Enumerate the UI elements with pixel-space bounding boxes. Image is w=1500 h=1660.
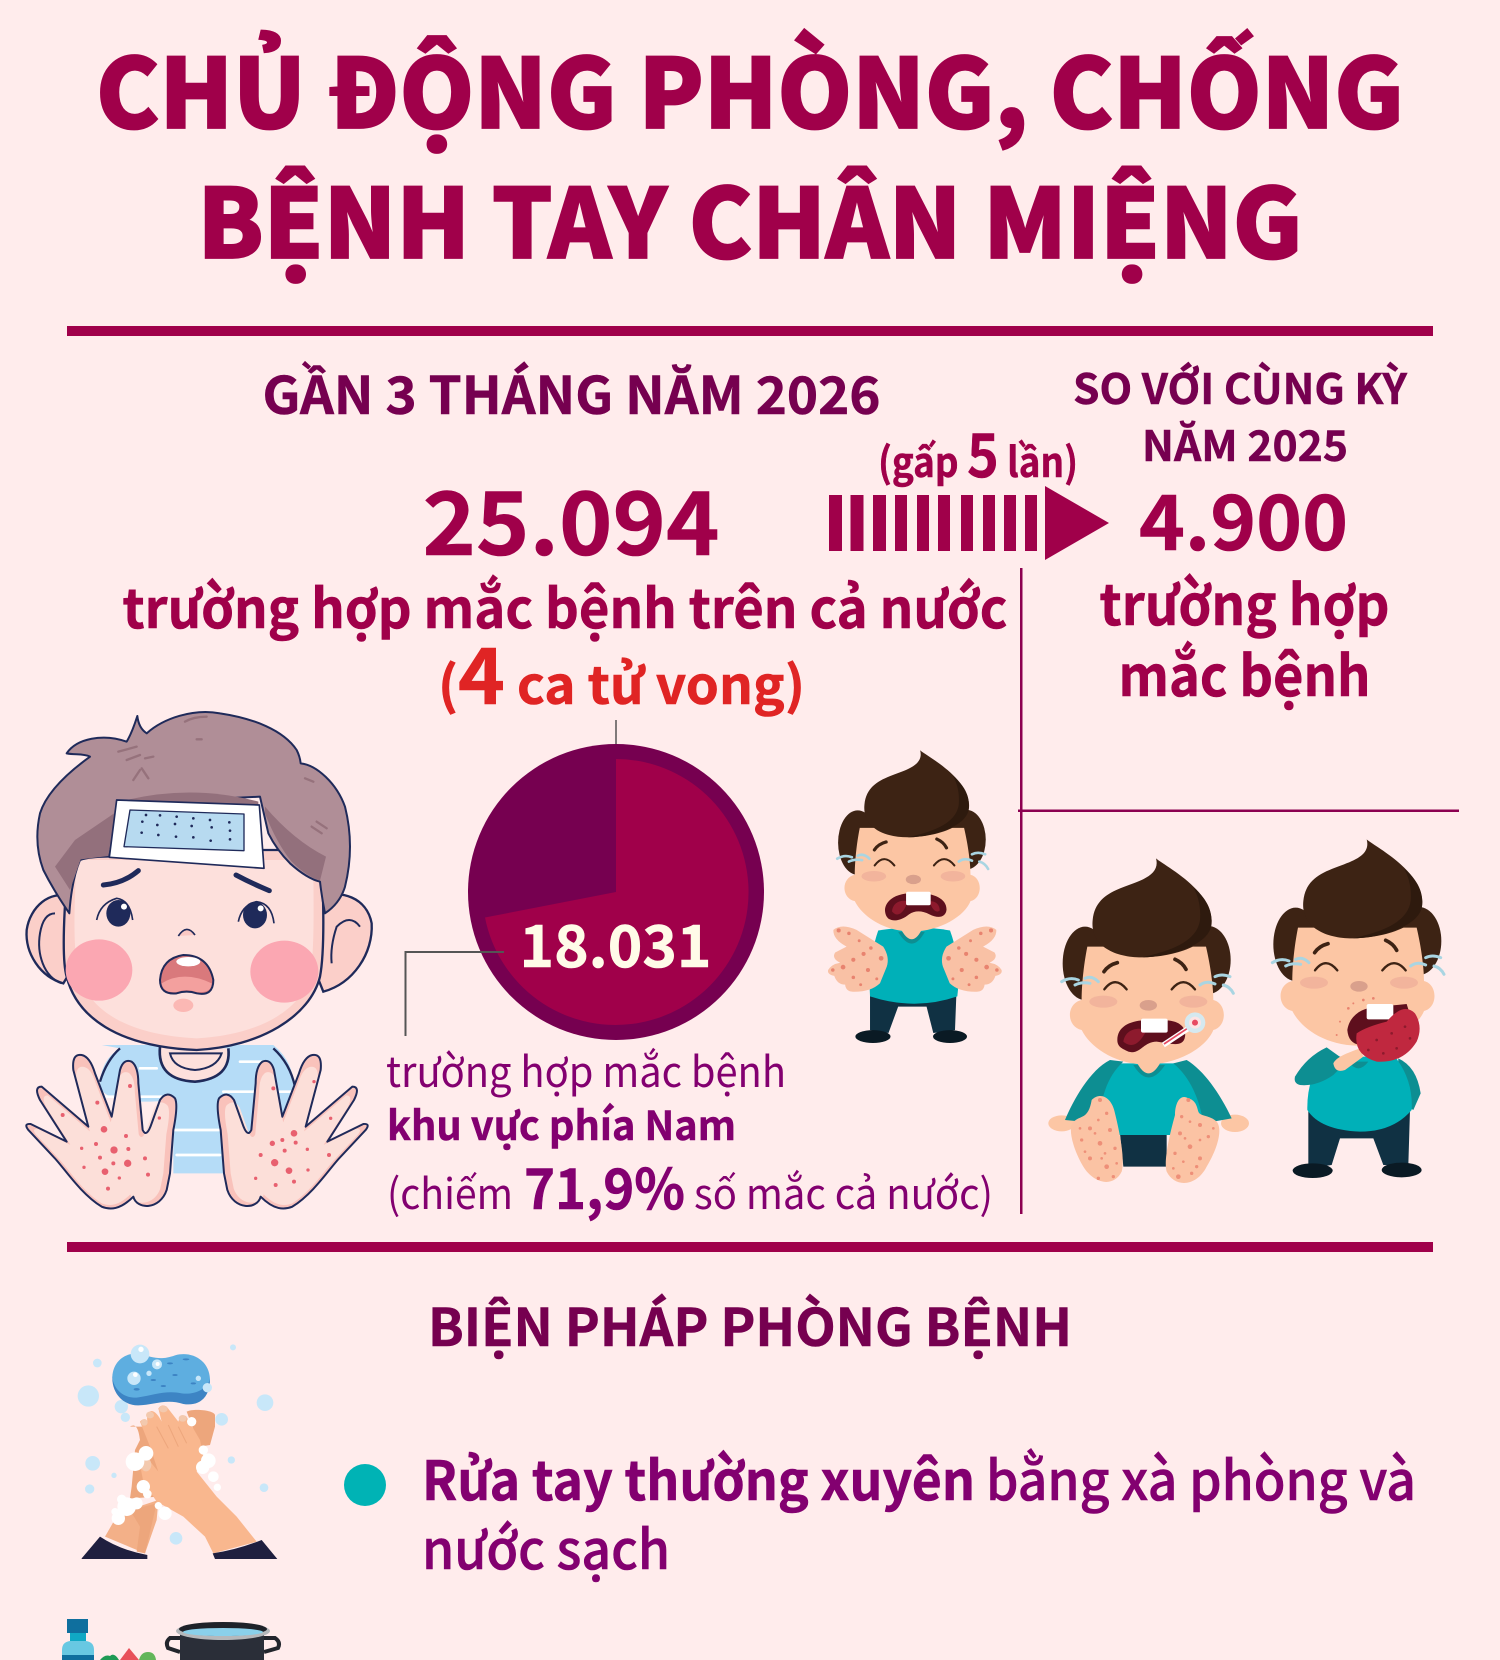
measure 1: hand washing: Rửa tay thường xuyên [422, 1437, 975, 1516]
south region description: khu vực phía Nam [387, 1094, 736, 1152]
measure 1: hand washing [344, 1437, 1416, 1585]
stat: 4.900 cases: 4.900 [1139, 462, 1348, 572]
south region description [386, 1039, 993, 1226]
stat: 25.094 cases [122, 454, 1008, 644]
measure 1: hand washing: bằng xà phòng và [986, 1437, 1416, 1516]
comparison heading: NĂM 2025 [1142, 413, 1348, 474]
deaths callout: (4 ca tử vong) [438, 615, 805, 727]
title: BỆNH TAY CHÂN MIỆNG [198, 147, 1302, 286]
south region description: trường hợp mắc bệnh [386, 1039, 786, 1100]
icon: handwashing with soap [78, 1344, 277, 1559]
pie value: 18.031 [520, 900, 712, 984]
illustration: crying boy with rash hands [828, 750, 1002, 1043]
south region description: (chiếm [387, 1161, 513, 1222]
measure 1: hand washing: nước sạch [422, 1506, 670, 1585]
comparison heading [1073, 356, 1408, 474]
illustration: standing boy with rash tongue [1272, 839, 1444, 1178]
stat: 25.094 cases: trường hợp mắc bệnh trên cả nước [122, 565, 1008, 644]
multiplier label: (gấp 5 lần) [878, 408, 1078, 495]
title: CHỦ ĐỘNG PHÒNG, CHỐNG [96, 17, 1404, 156]
south region description: 71,9% [524, 1145, 685, 1226]
icon: clean water, vegetables and boiling pot [62, 1619, 279, 1660]
arrow [829, 486, 1109, 560]
stat: 4.900 cases: trường hợp [1100, 561, 1390, 642]
illustration: sick boy with rash hands [26, 712, 372, 1209]
heading: biện pháp phòng bệnh: BIỆN PHÁP PHÒNG BỆNH [428, 1286, 1072, 1361]
heading: gần 3 tháng: GẦN 3 THÁNG NĂM 2026 [262, 354, 880, 429]
title [96, 17, 1404, 286]
illustration: seated boy with thermometer and rash feet [1048, 858, 1249, 1183]
comparison heading: SO VỚI CÙNG KỲ [1073, 356, 1408, 417]
pie chart [406, 720, 764, 1040]
stat: 4.900 cases: mắc bệnh [1118, 632, 1370, 713]
south region description: số mắc cả nước) [694, 1161, 993, 1222]
stat: 4.900 cases [1100, 462, 1390, 713]
stat: 25.094 cases: 25.094 [422, 454, 720, 581]
